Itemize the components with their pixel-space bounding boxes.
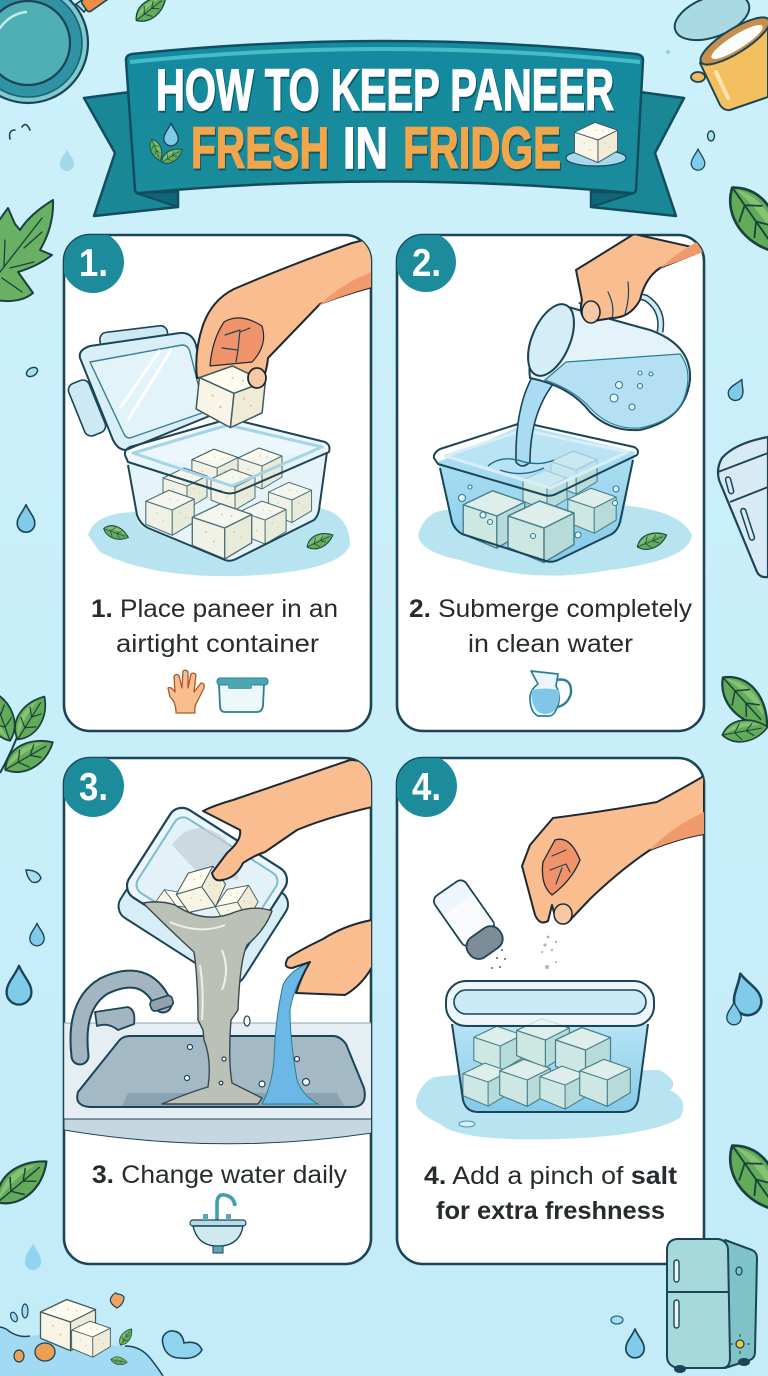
decoration: frying pan top left <box>0 0 111 103</box>
hand pinching <box>522 776 704 924</box>
panel 2: submerge in clean water <box>396 232 705 731</box>
panel 1 card <box>64 235 371 731</box>
pitcher <box>519 294 690 430</box>
small droplet <box>459 1121 475 1127</box>
salt grains from pinch <box>541 936 557 969</box>
decoration: leaf right lower <box>718 1135 768 1221</box>
basin floor <box>122 1093 344 1106</box>
panel 1 caption line 2: airtight container <box>116 630 319 658</box>
panel 4 illustration <box>416 776 704 1139</box>
panel 4 caption line 1: 4. Add a pinch of salt <box>424 1162 678 1190</box>
panel 4 badge: 4. <box>412 766 441 809</box>
decoration: leaf left lower <box>0 1150 56 1213</box>
reflection of hand <box>172 828 238 880</box>
panel 3 illustration <box>64 760 372 1144</box>
leaf <box>636 532 668 550</box>
panel 4 card <box>397 758 704 1264</box>
panel 3 badge: 3. <box>79 766 108 809</box>
tilted container lid <box>118 888 289 982</box>
dirty water pour <box>143 902 272 1104</box>
panel 3 badge <box>62 755 124 817</box>
icon: leaf and drop <box>147 123 185 167</box>
icon: small pitcher <box>530 671 571 716</box>
container back and cubes <box>125 418 329 561</box>
panel 4: add a pinch of salt <box>395 755 704 1264</box>
panel 1 illustration <box>66 238 372 576</box>
banner highlight <box>130 49 640 62</box>
decoration: small marks top left <box>10 125 30 139</box>
panel 3 caption: 3. Change water daily <box>92 1161 348 1189</box>
faucet <box>79 979 174 1056</box>
pouring stream <box>515 379 553 467</box>
clean water stream <box>262 962 318 1104</box>
dirty water highlights <box>170 922 226 1020</box>
panel 2 card <box>397 235 704 731</box>
puddle <box>418 505 692 576</box>
filled container <box>434 423 638 562</box>
decoration: fridge-like appliance at right edge <box>718 437 768 577</box>
counter front <box>64 1119 372 1144</box>
panel 1 badge <box>62 231 124 293</box>
decoration: compound leaf left top <box>0 200 53 301</box>
icon: fridge bottom right <box>667 1239 757 1373</box>
puddle <box>88 508 350 576</box>
decoration: leaf top <box>131 0 171 27</box>
tilted container <box>126 806 288 952</box>
panel 1: place paneer in airtight container <box>62 231 372 731</box>
decoration: pot and lid top right <box>669 0 768 110</box>
sink basin <box>77 1036 365 1107</box>
panel 3 card <box>64 758 371 1264</box>
panel 4 badge <box>395 755 457 817</box>
hand on stream <box>286 920 372 995</box>
panel 2 badge <box>396 232 456 292</box>
bubbles <box>184 1016 310 1087</box>
banner fold shadows <box>136 192 634 207</box>
panel 2 caption line 2: in clean water <box>468 630 633 658</box>
panel 3: change water daily <box>62 755 372 1264</box>
icon: small container <box>217 678 268 712</box>
panel 1 badge: 1. <box>79 242 108 285</box>
title banner <box>84 41 684 216</box>
title line 2 FRESH: FRESH <box>191 116 329 181</box>
icon: small hand <box>168 670 204 713</box>
icon: paneer cube on puddle <box>566 122 626 166</box>
salt shaker <box>431 878 507 963</box>
sink counter <box>64 1023 372 1119</box>
hand gripping container <box>203 760 372 880</box>
banner left tail <box>84 92 178 216</box>
container with cubes <box>446 981 654 1112</box>
decoration: leaf sprig left middle <box>0 687 59 780</box>
panel 2 illustration <box>418 234 705 576</box>
panel 2 caption line 1: 2. Submerge completely <box>409 595 693 623</box>
banner right tail <box>591 92 684 216</box>
title line 2 FRIDGE: FRIDGE <box>403 116 561 181</box>
puddle <box>416 1070 683 1139</box>
panel 1 caption line 1: 1. Place paneer in an <box>91 595 338 623</box>
cubes in container <box>156 866 258 916</box>
hand with cube <box>195 238 372 431</box>
decoration: leaves right middle <box>712 667 768 745</box>
title line 2 IN: IN <box>343 116 388 181</box>
icon: small sink <box>190 1195 246 1253</box>
decoration: leaf right top <box>718 177 768 263</box>
panel 4 caption line 2: for extra freshness <box>436 1197 665 1225</box>
banner body <box>126 41 643 193</box>
panel 2 badge: 2. <box>412 242 441 285</box>
small leaves <box>103 525 129 540</box>
swirl <box>488 459 554 474</box>
container inner <box>136 816 278 908</box>
hand on pitcher <box>576 234 705 323</box>
salt grains from shaker <box>491 949 506 969</box>
lid <box>66 325 212 450</box>
decoration: paneer and spill bottom left <box>0 1293 202 1376</box>
